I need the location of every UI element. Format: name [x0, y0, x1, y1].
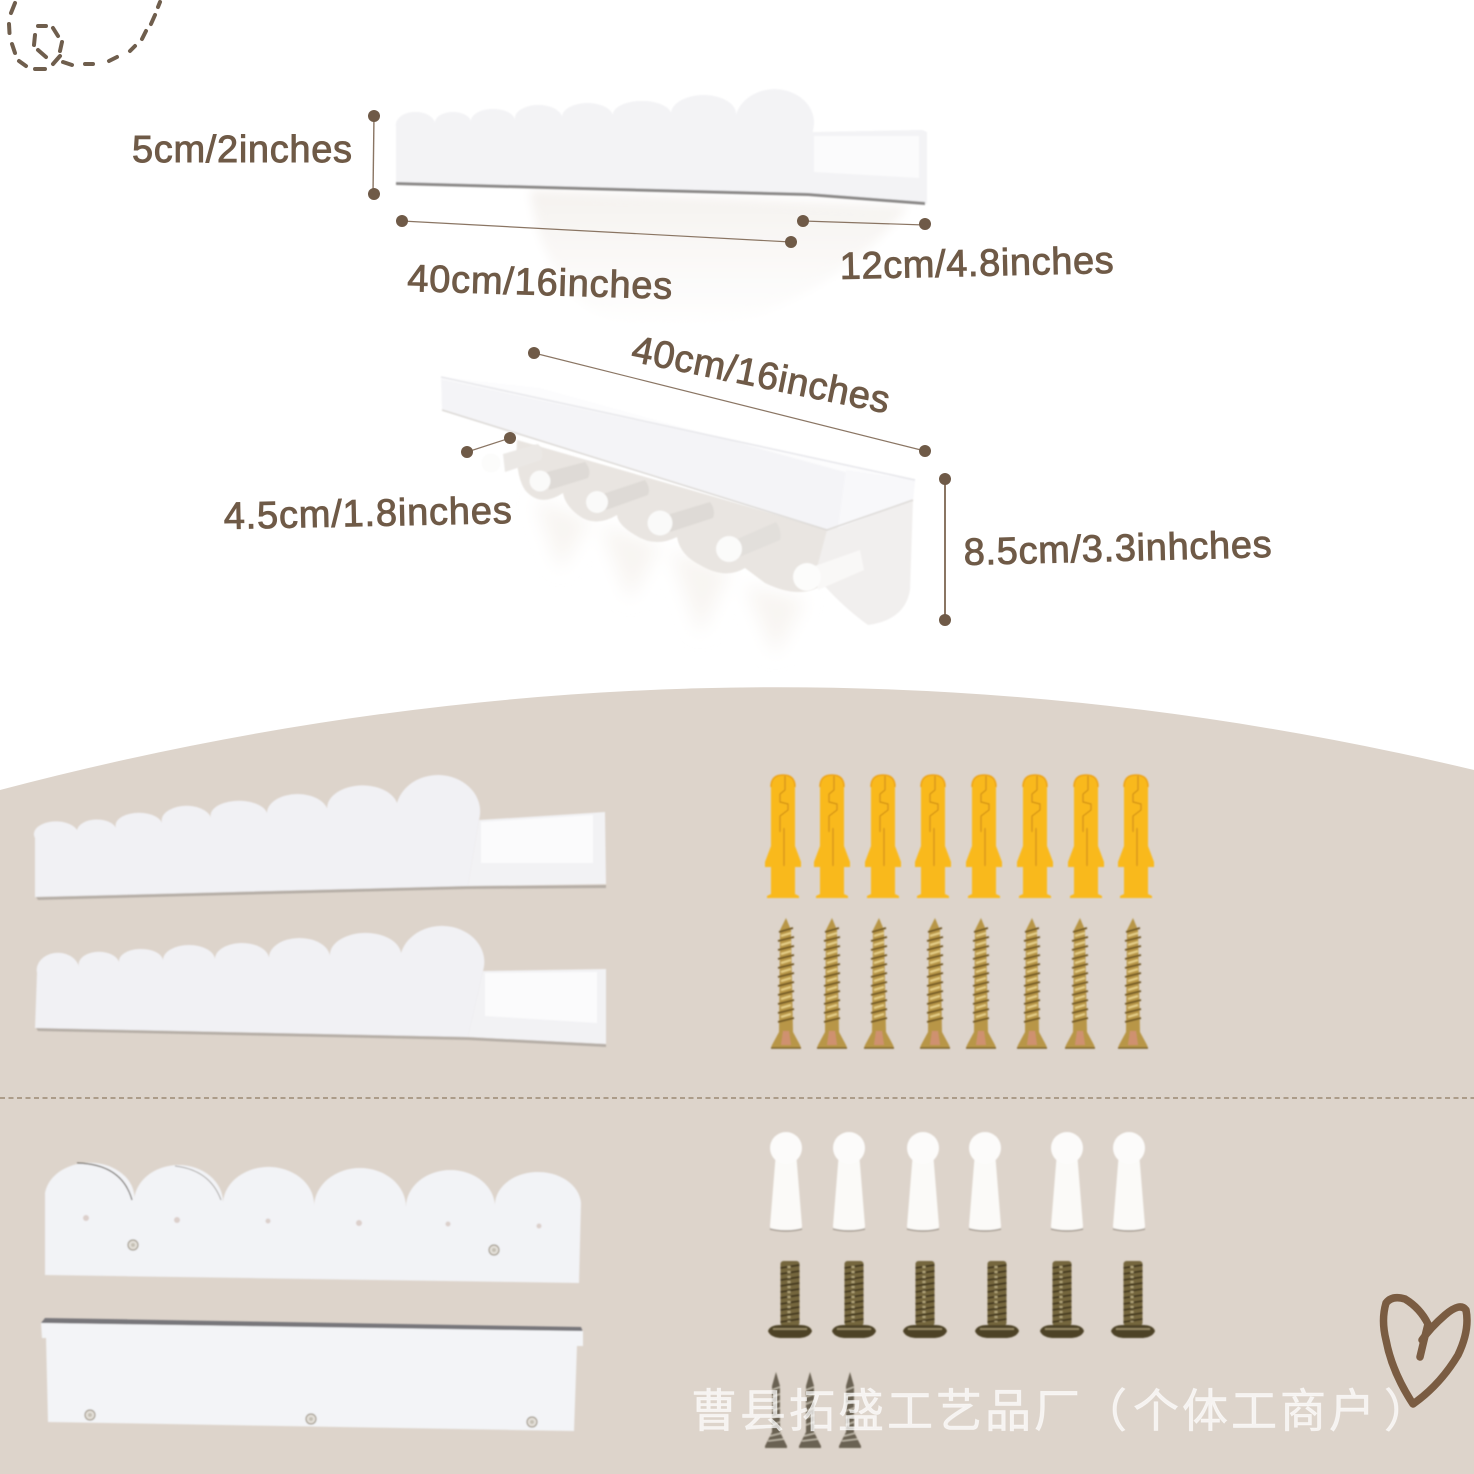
label: peg shelf length: 40cm/16inches	[628, 329, 893, 422]
shelf one: top view with scallops and tray	[396, 89, 927, 329]
label: peg length: 4.5cm/1.8inches	[223, 490, 512, 538]
product shelf A	[34, 775, 606, 900]
bronze bolts	[768, 1261, 1155, 1338]
shelf two: angled view with pegs	[441, 377, 915, 655]
shelf one body	[396, 89, 927, 205]
disassembled scallop back plate	[45, 1163, 581, 1283]
yellow wall plugs	[765, 775, 1154, 898]
shelf top and front rail	[441, 377, 915, 530]
dimension lines and dots	[368, 110, 951, 626]
peg shelf scallop fade marks	[535, 500, 805, 655]
top-left dashed swirl	[9, 2, 160, 69]
peg shelf scalloped back plate	[517, 440, 830, 592]
beige lower background	[0, 687, 1474, 1474]
small dark screws	[765, 1372, 861, 1448]
product shelf B	[35, 926, 606, 1047]
disassembled rail	[41, 1318, 583, 1431]
soft shadow under shelf one	[530, 190, 908, 329]
pegs	[482, 444, 864, 591]
label: peg shelf height: 8.5cm/3.3inhches	[963, 524, 1272, 574]
peg shelf side panel	[815, 500, 913, 625]
hand-drawn heart	[1384, 1298, 1467, 1404]
dashed divider	[0, 1097, 1474, 1099]
gold wood screws	[771, 918, 1148, 1048]
label: shelf length: 40cm/16inches	[407, 258, 673, 308]
peg holes	[83, 1215, 542, 1228]
label: shelf height: 5cm/2inches	[132, 129, 352, 171]
watermark: 曹县拓盛工艺品厂（个体工商户）	[691, 1385, 1430, 1437]
white wooden pegs	[770, 1132, 1145, 1231]
label: tray length: 12cm/4.8inches	[839, 240, 1114, 288]
